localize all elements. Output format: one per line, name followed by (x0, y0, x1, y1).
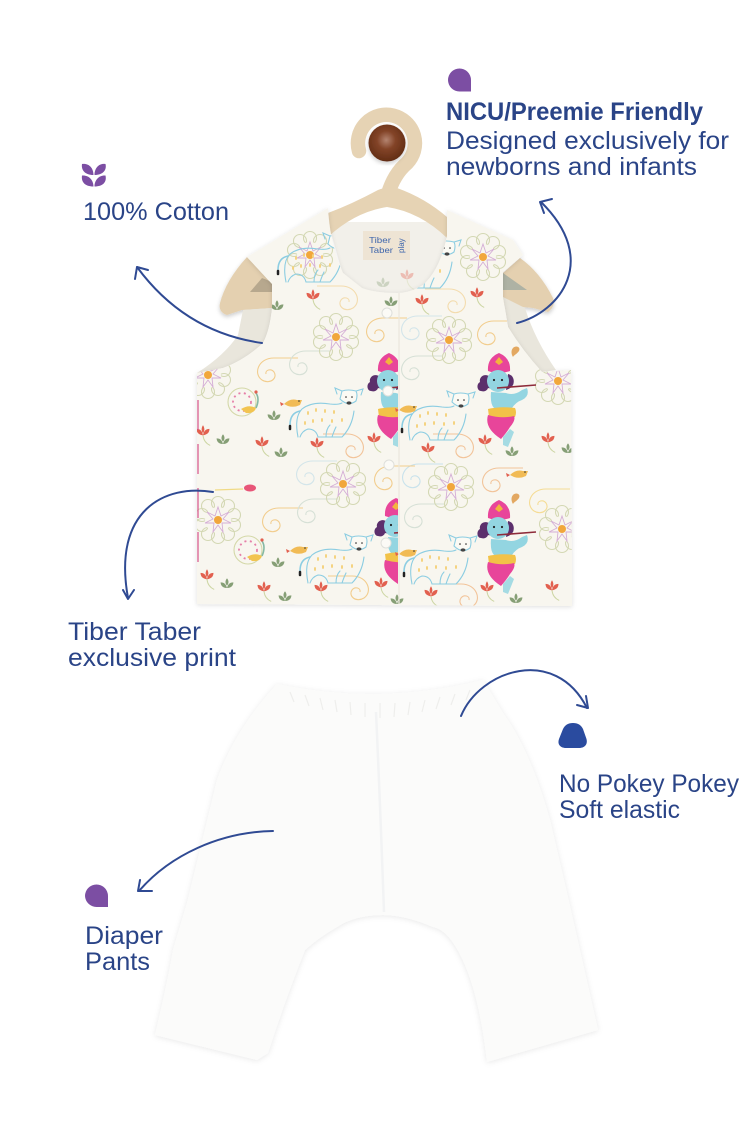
faint lining print (377, 269, 414, 289)
placket (398, 293, 400, 604)
neck label: Tiber (369, 235, 391, 245)
callout: diaper pants: Pants (85, 948, 150, 976)
label: 100% Cotton (83, 198, 229, 226)
description: Designed exclusively for (446, 127, 729, 155)
callout: print: Tiber Taber (68, 618, 201, 646)
callout: elastic: Soft elastic (559, 796, 680, 824)
back left armhole (197, 308, 272, 373)
neck label: Taber (369, 245, 393, 255)
jacket back layer (197, 187, 556, 373)
jacket front with print (186, 208, 584, 608)
center seam (376, 712, 384, 912)
neck label: play (397, 238, 406, 253)
arrow: diaper (138, 831, 273, 891)
label: Diaper (85, 922, 163, 950)
neck lining (328, 222, 447, 296)
hanger shoulders (328, 187, 447, 238)
elastic gathers (290, 690, 470, 718)
hanger right arm (503, 258, 554, 312)
pants body (155, 680, 598, 1062)
hanger left arm (220, 257, 272, 315)
cows (278, 233, 477, 584)
neck label (363, 231, 410, 260)
red sprigs (197, 287, 559, 606)
buttons (381, 308, 394, 548)
heading: NICU/Preemie Friendly (446, 98, 703, 126)
hanger hook (358, 115, 415, 194)
wooden ball (368, 124, 406, 162)
icon: leaves (82, 164, 106, 186)
arrow: print (123, 491, 213, 599)
back right armhole (503, 297, 556, 372)
description (446, 127, 729, 181)
arrow: elastic (461, 670, 588, 716)
icon: purple drop (85, 885, 108, 907)
arrow: NICU (517, 199, 571, 323)
callout: 100% cotton (82, 164, 229, 226)
label: No Pokey Pokey (559, 770, 739, 798)
printed motifs (186, 232, 584, 608)
callout: elastic (558, 723, 739, 824)
icon: blue rounded triangle (558, 723, 587, 748)
green sprigs (217, 296, 574, 604)
arrow: cotton (135, 267, 262, 343)
infographic canvas (68, 68, 739, 1062)
birds and peacocks (215, 388, 528, 564)
callout: diaper pants (85, 885, 163, 976)
flowers (186, 232, 584, 552)
callout: NICU (446, 68, 729, 181)
icon: purple drop (448, 68, 471, 92)
callout: print (68, 618, 236, 672)
callout: print: exclusive print (68, 644, 236, 672)
krishna figures (367, 347, 536, 594)
curls (258, 286, 570, 608)
jacket body (197, 208, 572, 606)
description: newborns and infants (446, 153, 697, 181)
left edge sliver (197, 400, 199, 565)
wooden hanger (220, 115, 554, 315)
white diaper pants (155, 680, 598, 1062)
